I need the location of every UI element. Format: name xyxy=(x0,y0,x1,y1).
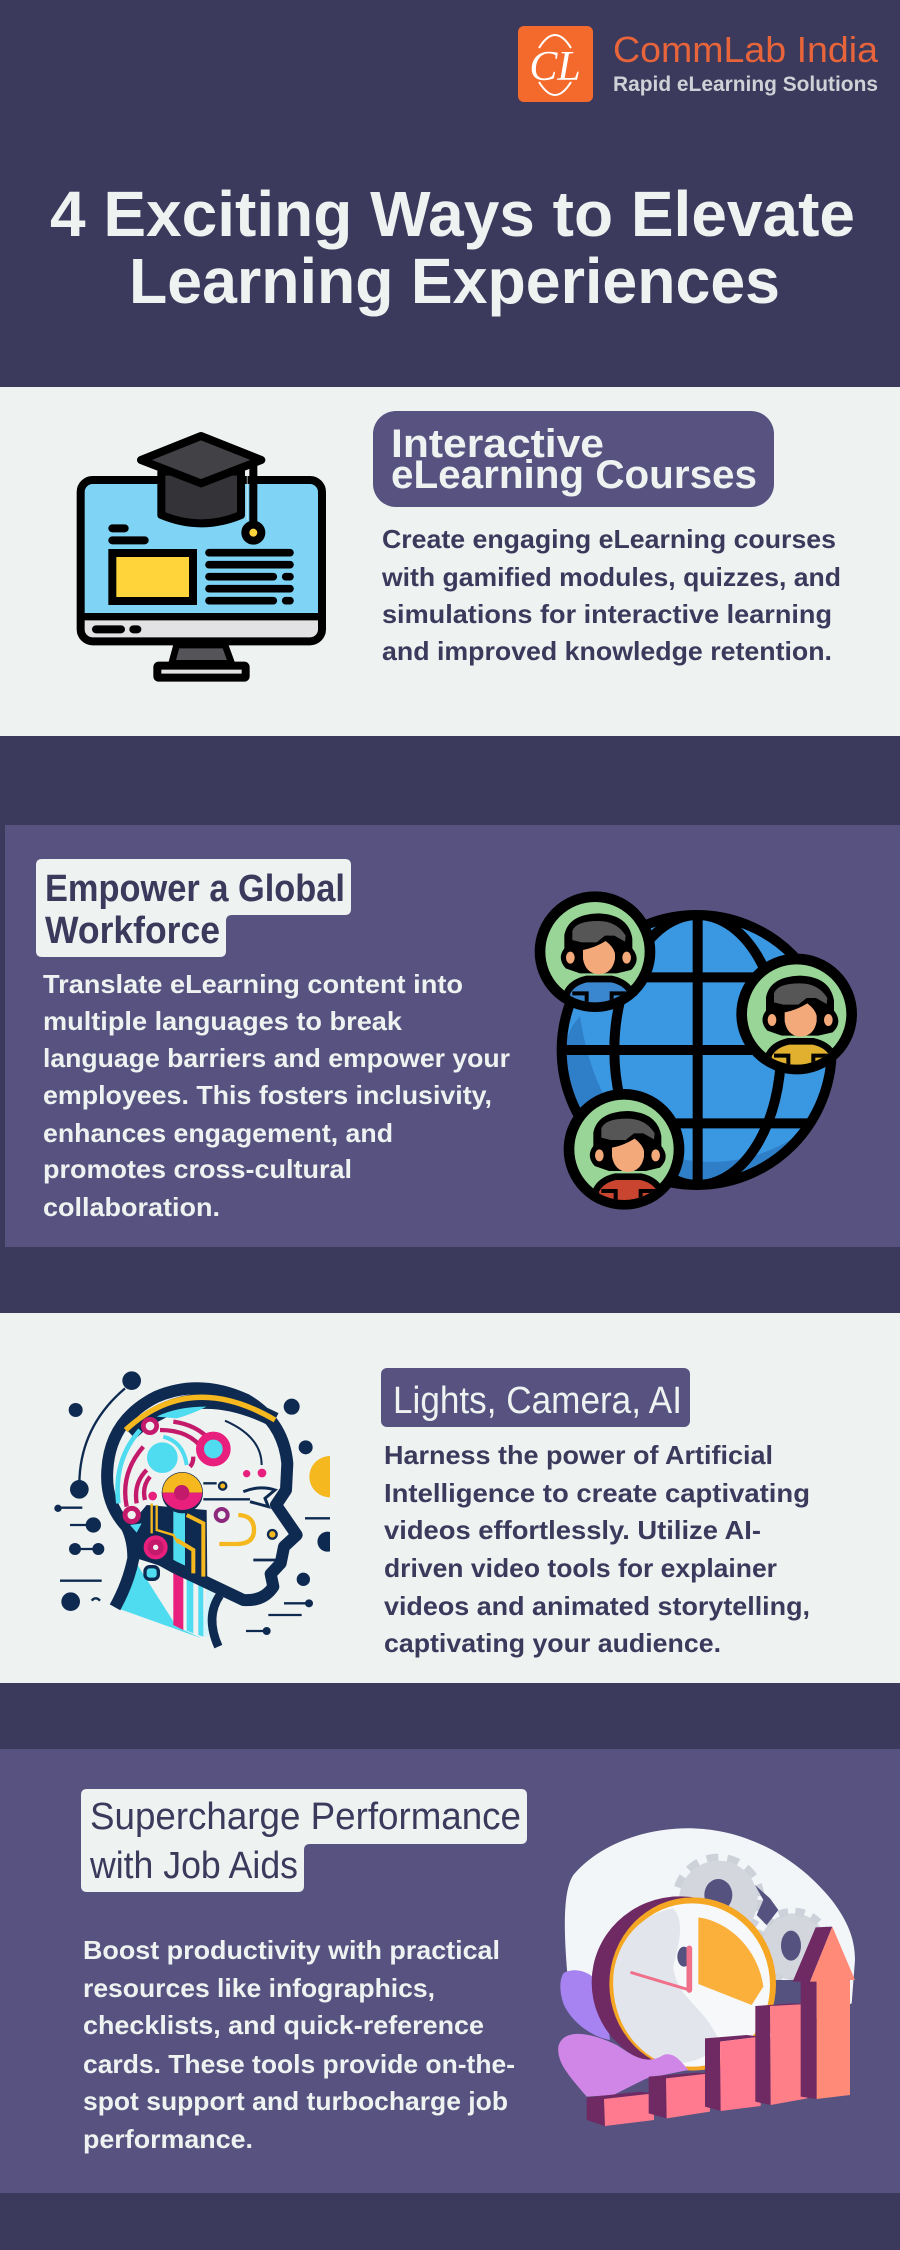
title: Learning Experiences xyxy=(129,245,780,317)
person: blue shirt xyxy=(540,897,650,1010)
body text: language barriers and empower your xyxy=(43,1043,510,1073)
body text: enhances engagement, and xyxy=(43,1118,393,1148)
rising bars xyxy=(587,1927,855,2126)
body text: Boost productivity with practical xyxy=(83,1935,500,1965)
body text: simulations for interactive learning xyxy=(382,599,832,629)
header xyxy=(50,26,879,317)
body text: multiple languages to break xyxy=(43,1006,403,1036)
body text: resources like infographics, xyxy=(83,1973,435,2003)
heading pill: eLearning Courses xyxy=(391,453,757,497)
heading pill: Workforce xyxy=(45,910,220,952)
body text: checklists, and quick-reference xyxy=(83,2010,484,2040)
title: 4 Exciting Ways to Elevate xyxy=(50,178,855,250)
body text: and improved knowledge retention. xyxy=(382,636,832,666)
body text xyxy=(83,1935,515,2154)
logo name: CommLab India xyxy=(613,29,879,70)
heading pill xyxy=(381,1368,690,1427)
body text: spot support and turbocharge job xyxy=(83,2086,508,2116)
body text: captivating your audience. xyxy=(384,1628,721,1658)
body text: videos and animated storytelling, xyxy=(384,1591,810,1621)
body text: promotes cross-cultural xyxy=(43,1154,352,1184)
heading pill xyxy=(81,1789,527,1892)
body text: performance. xyxy=(83,2124,253,2154)
heading pill: Lights, Camera, AI xyxy=(393,1380,682,1422)
logo xyxy=(518,26,879,102)
logo mark xyxy=(518,26,593,102)
heading pill: Empower a Global xyxy=(45,868,345,910)
body text xyxy=(384,1440,810,1658)
heading pill xyxy=(373,411,774,507)
body text: Harness the power of Artificial xyxy=(384,1440,773,1470)
heading pill: Supercharge Performance xyxy=(90,1796,521,1838)
body text: driven video tools for explainer xyxy=(384,1553,777,1583)
panel: lights camera AI xyxy=(0,1313,900,1683)
body text: Create engaging eLearning courses xyxy=(382,524,836,554)
logo mark: CL xyxy=(529,44,581,90)
panel: interactive eLearning courses xyxy=(0,387,900,736)
icon: clock, gears and rising bars xyxy=(558,1828,855,2126)
body text: cards. These tools provide on-the- xyxy=(83,2049,515,2079)
person: yellow shirt xyxy=(742,959,852,1072)
gears xyxy=(678,1859,828,1982)
clock xyxy=(592,1896,776,2071)
logo tagline: Rapid eLearning Solutions xyxy=(613,73,878,96)
heading pill: with Job Aids xyxy=(89,1845,298,1887)
leaves xyxy=(560,1970,610,2040)
person: red shirt xyxy=(569,1094,679,1208)
icon: monitor with graduation cap xyxy=(81,436,322,678)
panel: empower a global workforce xyxy=(5,825,900,1247)
title xyxy=(50,178,855,317)
body text xyxy=(381,524,841,666)
heading pill xyxy=(36,859,351,957)
body text: with gamified modules, quizzes, and xyxy=(381,562,841,592)
body text: collaboration. xyxy=(43,1192,220,1222)
body text: videos effortlessly. Utilize AI- xyxy=(384,1515,761,1545)
icon: AI head xyxy=(54,1371,330,1647)
icon: globe with three people xyxy=(540,897,852,1208)
body text: employees. This fosters inclusivity, xyxy=(43,1080,492,1110)
panel: supercharge performance with job aids xyxy=(0,1749,900,2193)
heading pill: Interactive xyxy=(391,422,604,466)
body text: Intelligence to create captivating xyxy=(384,1478,810,1508)
body text xyxy=(43,969,510,1222)
body text: Translate eLearning content into xyxy=(43,969,463,999)
